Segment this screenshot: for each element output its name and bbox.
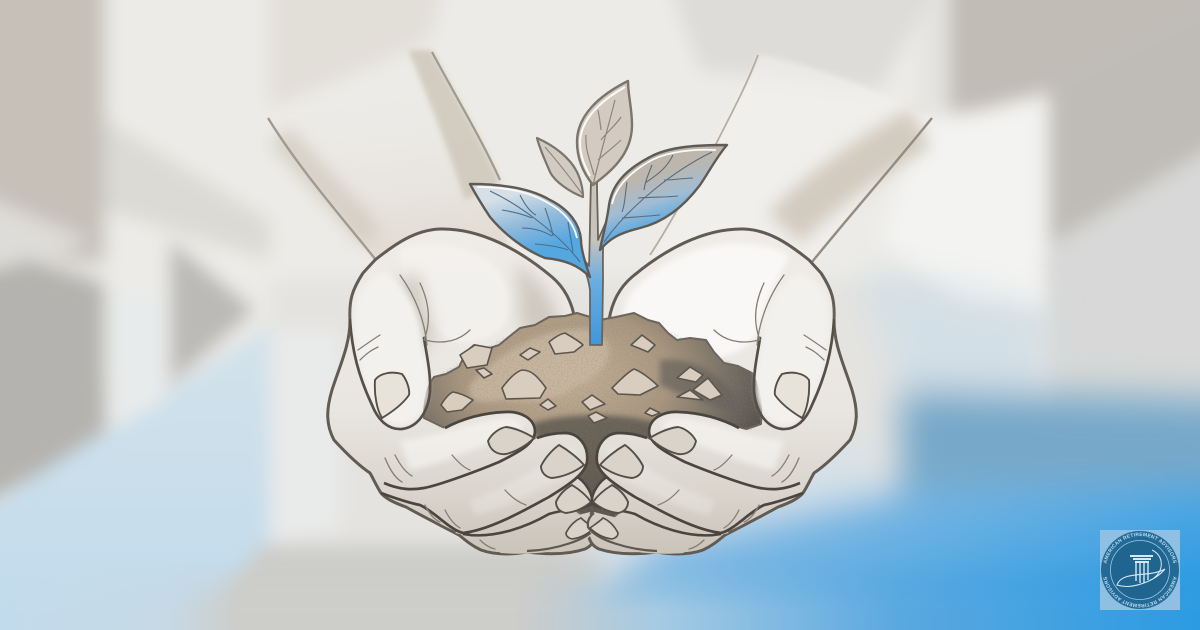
column emblem [1117, 550, 1165, 586]
leaf: top [577, 81, 632, 185]
left arm [268, 48, 510, 262]
soil mound [424, 313, 761, 520]
right fingers [588, 272, 834, 554]
leaf: right blue [600, 145, 727, 250]
rocks [441, 333, 722, 423]
right palm [584, 229, 856, 554]
logo badge [1100, 530, 1180, 610]
seedling [470, 81, 727, 345]
left fingers [350, 272, 596, 554]
leaf: small [537, 138, 583, 197]
logo badge: AMERICAN RETIREMENT ADVISORS [1104, 576, 1176, 608]
leaf: left blue [470, 184, 590, 277]
stem [577, 182, 606, 345]
left palm [328, 229, 600, 554]
soil grain [424, 313, 761, 520]
ring text: AMERICAN RETIREMENT ADVISORS [1104, 532, 1176, 564]
right arm [650, 55, 932, 262]
